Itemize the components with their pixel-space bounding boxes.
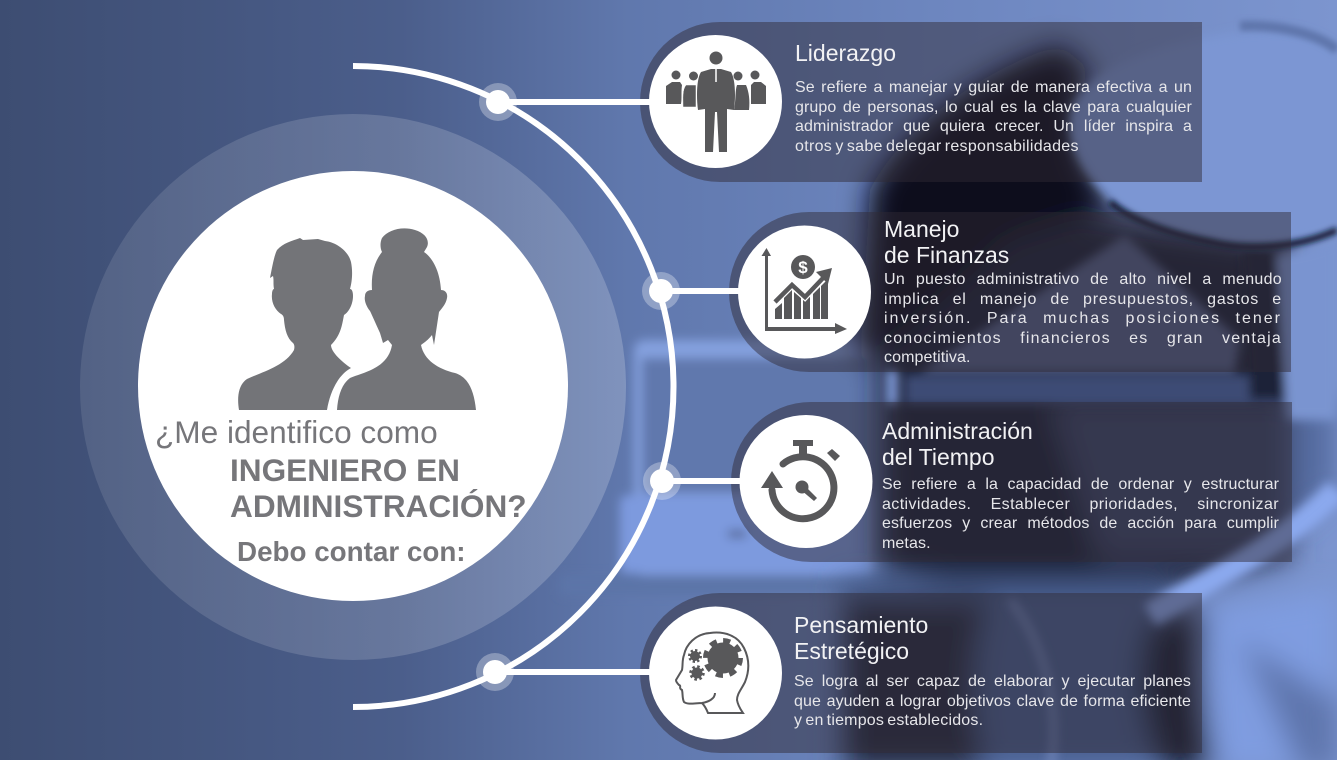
- title: Manejo de Finanzas: [884, 216, 1009, 268]
- text: finanzas description: [884, 271, 1282, 366]
- text: tiempo description: Se refiere a la capacidad de ordenar y estructurar: [882, 476, 1279, 493]
- text: Liderazgo description: Se refiere a manejar y guiar de manera efectiva a un: [795, 79, 1192, 96]
- title: Administración del Tiempo: [882, 418, 1033, 470]
- heading: central question: [155, 414, 527, 567]
- heading line: Ingeniero en: INGENIERO EN: [230, 452, 460, 488]
- panel: Administración del Tiempo: [731, 402, 1292, 562]
- text: pensamiento description: que ayuden a lograr objetivos clave de forma eficiente: [794, 692, 1191, 710]
- title: Manejo de Finanzas: Manejo: [884, 216, 959, 242]
- subheading: Debo contar con: Debo contar con:: [237, 536, 466, 567]
- title: Pensamiento Estratégico: Pensamiento: [794, 612, 928, 638]
- timeline nodes: [476, 83, 681, 691]
- title: Administración del Tiempo: del Tiempo: [882, 444, 995, 470]
- panel: Liderazgo: [640, 22, 1202, 182]
- text: tiempo description: metas.: [882, 534, 931, 552]
- dollar sign: $: [798, 258, 808, 277]
- text: tiempo description: actividades. Establecer prioridades, sincronizar: [882, 496, 1279, 512]
- text: Liderazgo description: [795, 79, 1192, 154]
- text: pensamiento description: [794, 673, 1191, 729]
- central white circle: [138, 171, 568, 601]
- text: pensamiento description: y en tiempos establecidos.: [794, 712, 983, 729]
- title: Manejo de Finanzas: de Finanzas: [884, 242, 1009, 268]
- text: Liderazgo description: otros y sabe delegar responsabilidades: [795, 138, 1079, 154]
- icon: head with gears: [649, 606, 782, 740]
- text: finanzas description: implica el manejo de presupuestos, gastos e: [884, 290, 1282, 308]
- icon: team leader: [649, 35, 782, 168]
- text: Liderazgo description: administrador que quiera crecer. Un líder inspira a: [795, 118, 1192, 135]
- large connecting arc: [353, 66, 674, 707]
- icon: man silhouette: [238, 238, 353, 410]
- text: finanzas description: competitiva.: [884, 349, 971, 366]
- title: Pensamiento Estratégico: [794, 612, 928, 664]
- text: finanzas description: conocimientos financieros es gran ventaja: [884, 330, 1282, 346]
- text: Liderazgo description: grupo de personas, lo cual es la clave para cualquier: [795, 98, 1192, 116]
- text: tiempo description: esfuerzos y crear métodos de acción para cumplir: [882, 515, 1279, 532]
- icon: finance chart: [738, 226, 871, 358]
- text: finanzas description: inversión. Para muchas posiciones tener: [884, 310, 1282, 327]
- icon: stopwatch: [740, 415, 872, 548]
- text: pensamiento description: Se logra al ser capaz de elaborar y ejecutar planes: [794, 673, 1191, 690]
- text: tiempo description: [882, 476, 1279, 552]
- text: finanzas description: Un puesto administrativo de alto nivel a menudo: [884, 271, 1282, 288]
- central halo circle: [80, 114, 626, 660]
- panel: Manejo de Finanzas: [729, 212, 1291, 372]
- title: Liderazgo: Liderazgo: [795, 40, 896, 66]
- heading line: Administración: ADMINISTRACIÓN?: [230, 488, 527, 524]
- title: Administración del Tiempo: Administración: [882, 418, 1033, 444]
- icon: woman silhouette: [337, 228, 476, 410]
- title: Pensamiento Estratégico: Estretégico: [794, 638, 909, 664]
- panel: Pensamiento Estratégico: [640, 593, 1202, 753]
- heading line: Me identifico como: ¿Me identifico como: [155, 414, 438, 450]
